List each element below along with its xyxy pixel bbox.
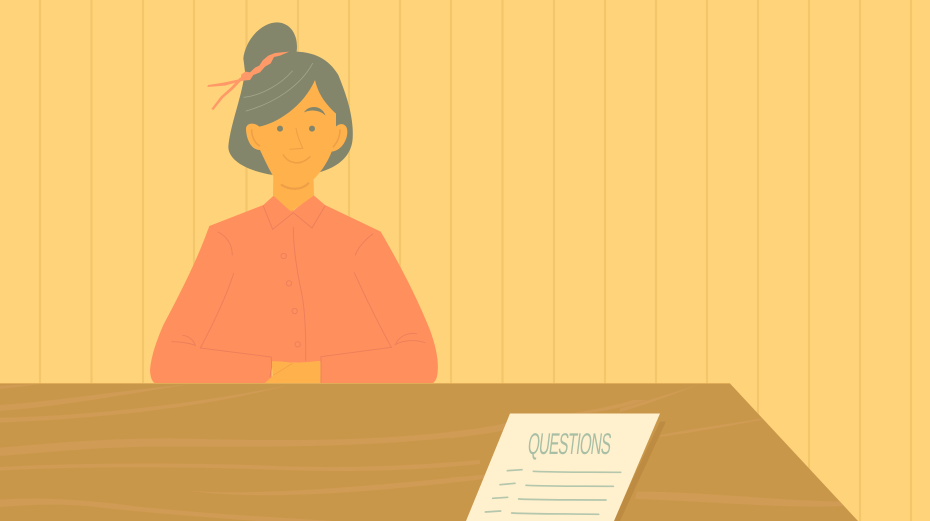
wood grain right	[450, 400, 647, 482]
neck	[273, 172, 314, 212]
shirt fold lines	[172, 206, 425, 383]
eyebrow	[304, 107, 326, 116]
wood grain left	[0, 384, 480, 521]
questions paper	[466, 414, 666, 521]
question list lines	[485, 470, 621, 514]
face	[246, 80, 347, 187]
facial features	[252, 126, 340, 189]
paper shadow	[613, 422, 666, 521]
hair strands	[244, 63, 313, 111]
hair	[228, 22, 353, 175]
paper title: QUESTIONS	[526, 428, 613, 462]
person	[150, 22, 438, 385]
hair stick	[207, 52, 289, 110]
shirt	[150, 195, 438, 385]
table	[0, 383, 858, 521]
hands	[263, 361, 321, 385]
paper sheet	[466, 414, 660, 521]
head	[207, 22, 353, 212]
